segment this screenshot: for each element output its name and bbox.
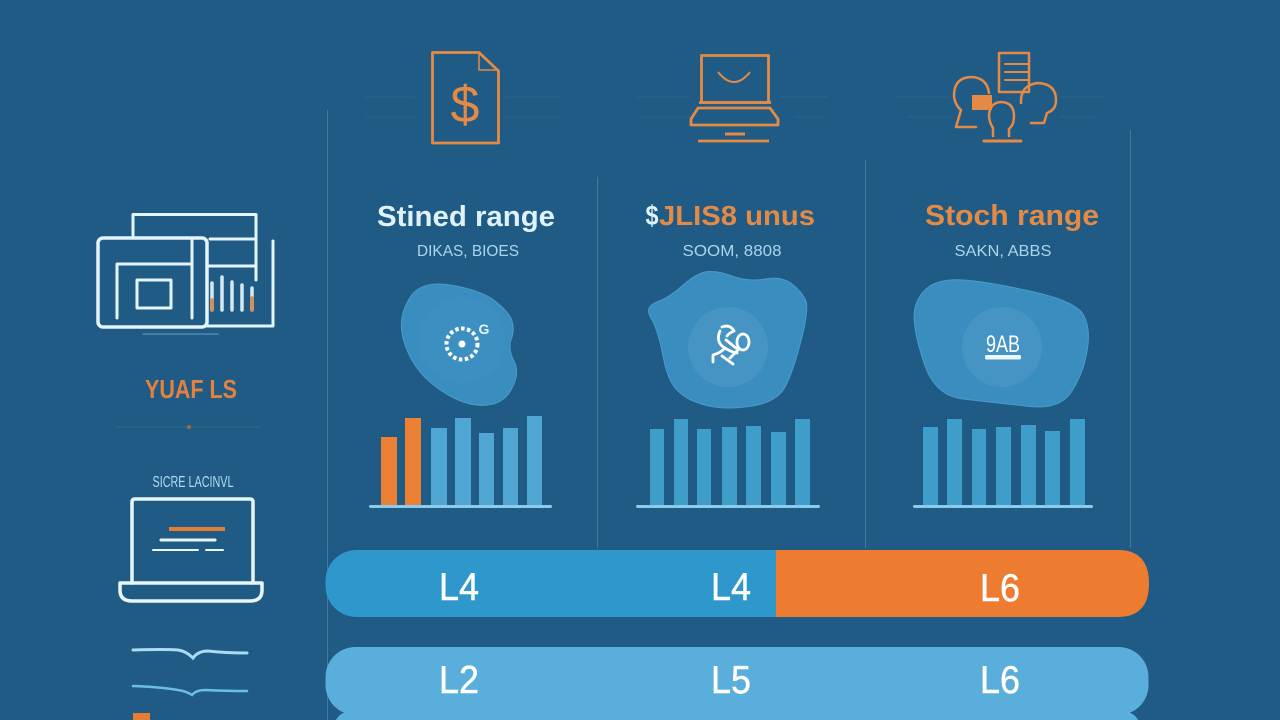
heading: sidebar orange label: YUAF LS bbox=[145, 374, 237, 404]
heading: column 1 title: Stined range bbox=[377, 201, 555, 233]
table row: L2 L5 L6: L6 bbox=[980, 659, 1020, 702]
panel: column 2 bbox=[636, 56, 820, 508]
blob with gear icon: G bbox=[479, 321, 490, 337]
table row: L4 L4 L6: L6 bbox=[980, 567, 1020, 610]
icon: overlapping windows with mini chart bbox=[98, 214, 273, 334]
table row: L4 L4 L6 bbox=[326, 550, 1149, 617]
blob with gear icon bbox=[401, 284, 517, 405]
icon: laptop with text lines bbox=[120, 499, 262, 601]
text: column 1 subtitle: DIKAS, BIOES bbox=[417, 243, 519, 260]
panel: column 1 bbox=[369, 52, 555, 508]
bar chart: column 3 bbox=[913, 419, 1093, 508]
blob with building icon: 9AB bbox=[986, 331, 1020, 358]
icon: dollar document: $ bbox=[451, 76, 480, 134]
icon: laptop with smile bbox=[691, 56, 778, 141]
table row: L4 L4 L6: L4 bbox=[711, 566, 751, 609]
table row: L2 L5 L6: L2 bbox=[439, 659, 479, 702]
blob with building icon bbox=[914, 280, 1088, 407]
panel: left sidebar bbox=[98, 214, 273, 720]
bar chart: column 2 bbox=[636, 419, 820, 508]
heading: column 2 title: JLIS8 unus bbox=[659, 200, 815, 231]
panel: column 3 bbox=[913, 53, 1099, 508]
icon: people with speech document bbox=[954, 53, 1056, 141]
text: column 2 subtitle: SOOM, 8808 bbox=[682, 243, 782, 260]
icon: first wavy line bbox=[133, 650, 247, 658]
heading: column 3 title: Stoch range bbox=[925, 200, 1099, 232]
table row: cropped third row bbox=[336, 711, 1138, 720]
text: sidebar caption: SICRE LACINVL bbox=[152, 474, 234, 491]
icon: second wavy line bbox=[133, 686, 247, 695]
table row: L2 L5 L6 bbox=[326, 647, 1148, 715]
text: column 3 subtitle: SAKN, ABBS bbox=[954, 243, 1052, 260]
bar chart: column 1 bbox=[369, 416, 552, 508]
icon: orange square bbox=[133, 713, 150, 720]
table row: L2 L5 L6: L5 bbox=[711, 659, 751, 702]
icon: dollar document bbox=[432, 52, 498, 143]
divider with dot bbox=[115, 425, 260, 429]
heading: column 2 title: $ bbox=[646, 200, 659, 231]
table row: L4 L4 L6: L4 bbox=[439, 566, 479, 609]
blob with figure icon bbox=[649, 272, 807, 408]
